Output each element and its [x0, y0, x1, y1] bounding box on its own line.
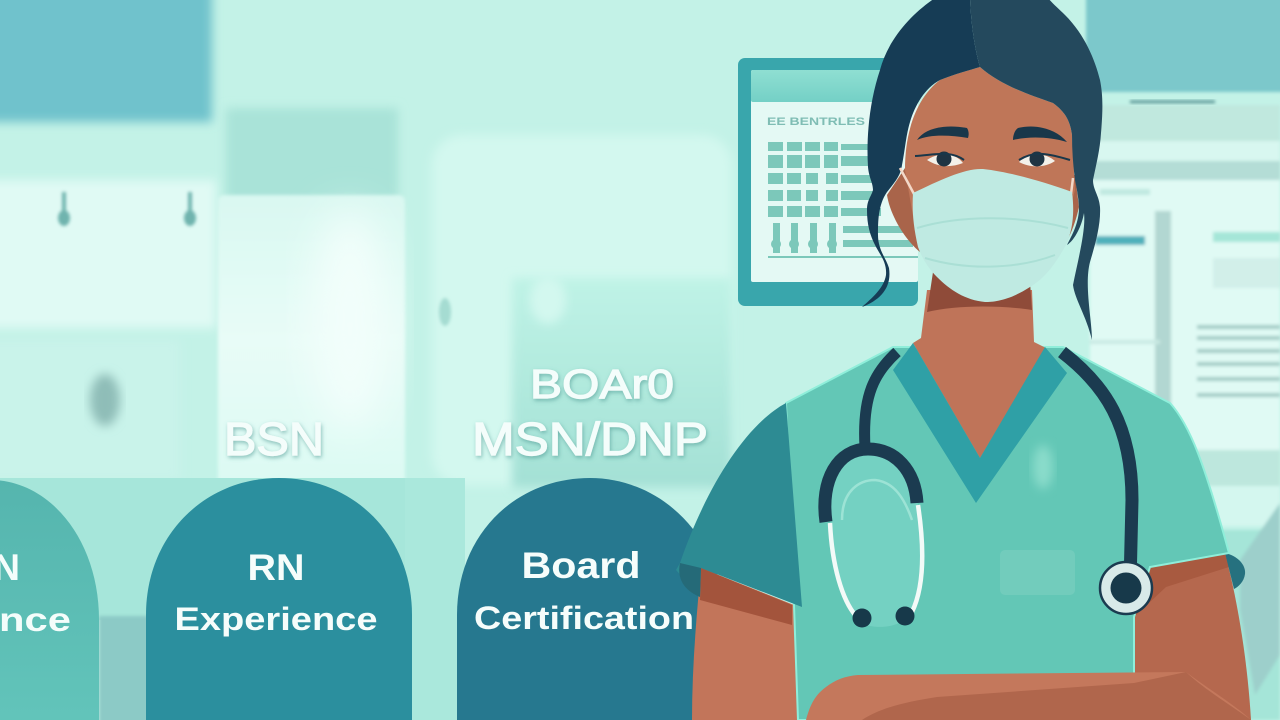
- monitor header text: EE BENTRLES: [767, 116, 865, 128]
- right sleeve cuff: [1225, 553, 1245, 589]
- neck: [913, 290, 1046, 458]
- text: BSN: BSN: [224, 413, 324, 465]
- eyebrows: [917, 126, 1067, 142]
- badge pocket: [1000, 550, 1075, 595]
- yoke: [825, 449, 917, 522]
- chest piece: [1100, 562, 1152, 614]
- forearm shade: [862, 672, 1251, 720]
- neck shadow: [927, 272, 1032, 312]
- text: Board: BOAr0: [530, 361, 674, 407]
- hair: right section: [970, 0, 1102, 340]
- monitor header bar: [751, 70, 918, 102]
- arch: RN Experience: [146, 478, 412, 720]
- right arm sleeve shadow: [1134, 553, 1229, 617]
- inner tube oval: [829, 445, 922, 627]
- arch sublabel: Certification: [474, 600, 694, 636]
- collar: [893, 343, 1067, 503]
- forearm: [806, 672, 1251, 720]
- ear tips: [852, 608, 872, 628]
- chest highlight: [1033, 445, 1053, 489]
- face: [905, 67, 1075, 245]
- monitor: schedule chart: [738, 58, 918, 306]
- mask: [913, 169, 1073, 302]
- hair: left section: [862, 0, 980, 307]
- arch sublabel: nce: [0, 601, 71, 638]
- left tube: [865, 352, 897, 447]
- arch: RN license (cropped): [0, 480, 99, 720]
- text: MSN/DNP: MSN/DNP: [472, 413, 708, 465]
- arch sublabel: Experience: [174, 601, 378, 637]
- ear left: [887, 168, 925, 252]
- monitor screen: [751, 70, 918, 282]
- arch: Board Certification: [457, 478, 725, 720]
- illustration: nurse: [676, 0, 1251, 720]
- left sleeve: [676, 403, 802, 607]
- monitor grid: [768, 142, 918, 258]
- mask loops: [900, 168, 1073, 194]
- stethoscope: [825, 352, 1152, 628]
- white ear tubes: [830, 523, 856, 616]
- scrub top: [786, 347, 1229, 720]
- left arm: [692, 568, 800, 720]
- left arm sleeve shadow: [700, 568, 792, 625]
- eyes: [915, 152, 1070, 166]
- arch label: Board: [522, 545, 640, 586]
- left sleeve cuff: [679, 563, 701, 597]
- right tube: [1062, 352, 1132, 585]
- right arm: [1134, 553, 1251, 720]
- arch label: RN: [248, 547, 304, 588]
- ear right: [1055, 175, 1079, 245]
